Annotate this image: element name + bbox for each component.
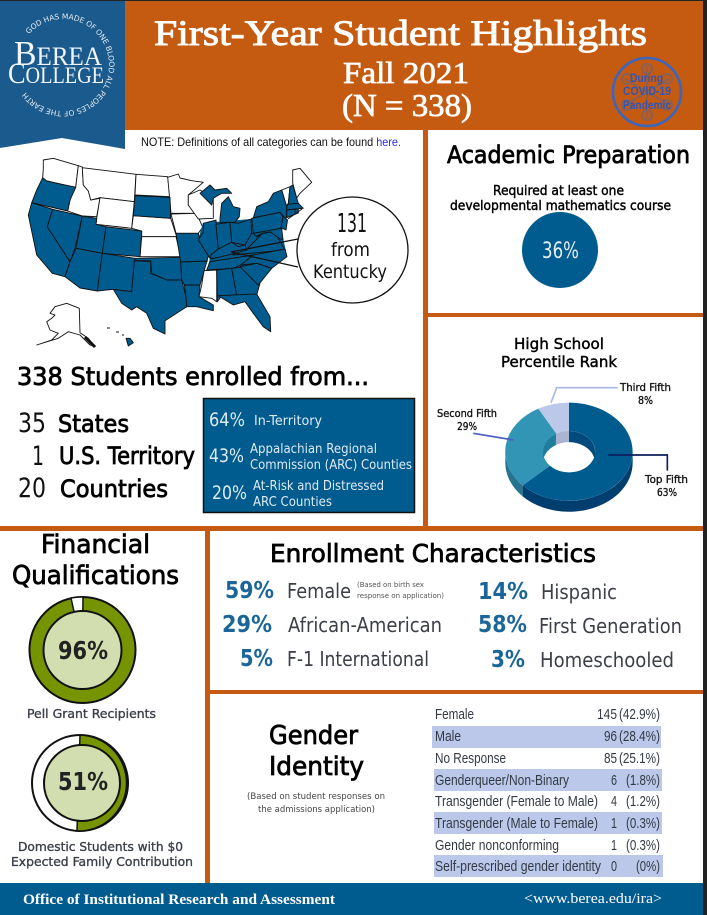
table: gender identity counts: (25.1%) [619, 750, 660, 767]
panel: academic preparation [447, 141, 690, 288]
callout: Kentucky students [231, 197, 408, 303]
table: gender identity counts: 6 [611, 772, 617, 789]
table: gender identity counts: Genderqueer/Non-Binary [435, 772, 569, 789]
table: gender identity counts: Transgender (Male to Female) [435, 815, 598, 832]
panel: financial qualifications [11, 530, 193, 869]
geographic origin counts: States [58, 410, 129, 438]
panel: gender identity heading: Gender [269, 721, 358, 751]
panel: in-territory statistics: At-Risk and Distressed [253, 479, 384, 494]
panel: academic preparation: developmental mathematics course [450, 199, 671, 214]
geographic origin counts: U.S. Territory [59, 442, 195, 470]
US map of states represented [28, 158, 312, 347]
header band [125, 1, 703, 130]
table: gender identity counts: 0 [611, 858, 617, 875]
zero EFC caption [11, 839, 193, 869]
panel: in-territory statistics: Commission (ARC) Counties [250, 458, 412, 473]
table: gender identity counts: (0%) [636, 858, 660, 875]
table: gender identity counts: Self-prescribed gender identity [435, 858, 601, 875]
table: gender identity counts: (42.9%) [619, 706, 660, 723]
panel: gender identity heading: the admissions application) [258, 805, 375, 815]
zero EFC caption: Domestic Students with $0 [18, 839, 183, 854]
table: gender identity counts: Female [435, 706, 474, 723]
geographic origin counts: Countries [60, 475, 168, 503]
panel: enrollment characteristics: Hispanic [541, 580, 617, 604]
college logo banner: GOD HAS MADE OF ONE BLOOD ALL PEOPLES OF THE EARTH [22, 14, 115, 116]
badge: during COVID-19 pandemic: Pandemic [623, 98, 671, 112]
panel: enrollment characteristics: 29% [222, 612, 272, 638]
table: gender identity counts [432, 706, 663, 877]
donut labels: Second Fifth [437, 407, 497, 420]
panel: enrollment characteristics: Enrollment Characteristics [270, 539, 596, 568]
developmental math percentage [522, 212, 598, 288]
donut labels: Top Fifth [644, 473, 688, 486]
panel: enrollment characteristics: 14% [478, 579, 528, 605]
subtitle: sample size: (N = 338) [342, 87, 472, 123]
callout: Kentucky students: from [331, 239, 370, 261]
college logo banner: BEREA [14, 34, 102, 73]
badge: during COVID-19 pandemic [613, 58, 681, 126]
panel: financial qualifications: Financial [41, 530, 150, 560]
panel: gender identity heading: (Based on student responses on [247, 792, 385, 802]
footer [0, 883, 703, 915]
table: gender identity counts: Male [435, 728, 461, 745]
zero EFC caption: Expected Family Contribution [11, 854, 193, 869]
heading: high school percentile rank [501, 335, 617, 371]
table: gender identity counts: 85 [604, 750, 617, 767]
panel: in-territory statistics [204, 398, 414, 512]
geographic origin counts: 35 [18, 408, 46, 439]
heading: high school percentile rank: Percentile Rank [501, 353, 617, 371]
panel: enrollment characteristics: First Generation [539, 614, 682, 638]
note about definitions: NOTE: Definitions of all categories can be found here. [141, 135, 401, 149]
panel: enrollment characteristics: response on application) [357, 592, 444, 600]
panel: in-territory statistics: ARC Counties [253, 495, 332, 510]
subtitle: term: Fall 2021 [343, 55, 469, 90]
panel: in-territory statistics: In-Territory [254, 414, 322, 429]
panel: in-territory statistics: 64% [209, 409, 245, 431]
geographic origin counts: 1 [32, 441, 44, 472]
callout: Kentucky students: 131 [337, 209, 367, 239]
panel: enrollment characteristics: African-American [288, 613, 442, 637]
table: gender identity counts: (1.2%) [626, 793, 660, 810]
badge: during COVID-19 pandemic: COVID-19 [623, 84, 671, 98]
donut labels: 63% [657, 486, 677, 499]
heading: high school percentile rank: High School [514, 335, 604, 353]
donut labels [437, 381, 688, 499]
geographic origin counts: 20 [18, 473, 46, 504]
panel: gender identity heading [247, 721, 385, 815]
3D donut chart [473, 388, 667, 512]
panel: enrollment characteristics: Female [287, 579, 351, 603]
college logo banner [0, 1, 125, 149]
table: gender identity counts: (1.8%) [626, 772, 660, 789]
table: gender identity counts: (0.3%) [626, 815, 660, 832]
leader lines [551, 388, 618, 403]
table: gender identity counts: 4 [611, 793, 617, 810]
panel: enrollment characteristics: 59% [225, 578, 274, 604]
enrolled from heading: 338 Students enrolled from... [17, 362, 369, 391]
table: gender identity counts: Transgender (Female to Male) [435, 793, 598, 810]
blue states [28, 178, 303, 346]
ring: zero EFC 51%: 51% [58, 767, 108, 796]
footer: Office of Institutional Research and Assessment [23, 892, 335, 908]
geographic origin counts [18, 408, 195, 504]
donut labels: 8% [638, 394, 653, 407]
Pell grant caption: Pell Grant Recipients [27, 706, 156, 721]
table: gender identity counts: 1 [611, 815, 617, 832]
title: First-Year Student Highlights [154, 13, 647, 53]
panel: enrollment characteristics [222, 539, 682, 673]
badge: during COVID-19 pandemic: During [630, 71, 663, 85]
panel: enrollment characteristics: F-1 International [287, 647, 429, 671]
table: gender identity counts: No Response [435, 750, 506, 767]
white states [37, 158, 312, 347]
footer: <www.berea.edu/ira> [524, 891, 662, 907]
table: gender identity counts: 145 [597, 706, 617, 723]
ring: Pell grant 96% [30, 597, 136, 703]
table: gender identity counts: (0.3%) [626, 837, 660, 854]
panel: financial qualifications: Qualifications [12, 561, 179, 591]
table: gender identity counts: (28.4%) [619, 728, 660, 745]
callout: Kentucky students: Kentucky [313, 261, 387, 283]
panel: in-territory statistics: 20% [212, 482, 247, 504]
college logo banner: COLLEGE [8, 57, 104, 90]
table: gender identity counts: 96 [604, 728, 617, 745]
developmental math percentage: 36% [542, 239, 579, 264]
panel: enrollment characteristics: 58% [478, 612, 527, 638]
panel: academic preparation: Academic Preparation [447, 141, 690, 169]
panel: in-territory statistics: 43% [209, 445, 244, 467]
panel: enrollment characteristics: (Based on birth sex [357, 581, 424, 589]
panel: in-territory statistics: Appalachian Regional [250, 442, 377, 457]
table: gender identity counts: 1 [611, 837, 617, 854]
donut labels: Third Fifth [619, 381, 671, 394]
panel: academic preparation: Required at least one [493, 184, 624, 199]
ring: zero EFC 51% [32, 735, 128, 831]
panel: enrollment characteristics: 5% [240, 646, 273, 672]
table: gender identity counts: Gender nonconforming [435, 837, 559, 854]
ring: Pell grant 96%: 96% [58, 636, 108, 665]
panel: gender identity heading: Identity [269, 752, 364, 782]
donut labels: 29% [457, 420, 477, 433]
panel: enrollment characteristics: Homeschooled [540, 648, 674, 672]
panel: enrollment characteristics: 3% [491, 647, 525, 673]
